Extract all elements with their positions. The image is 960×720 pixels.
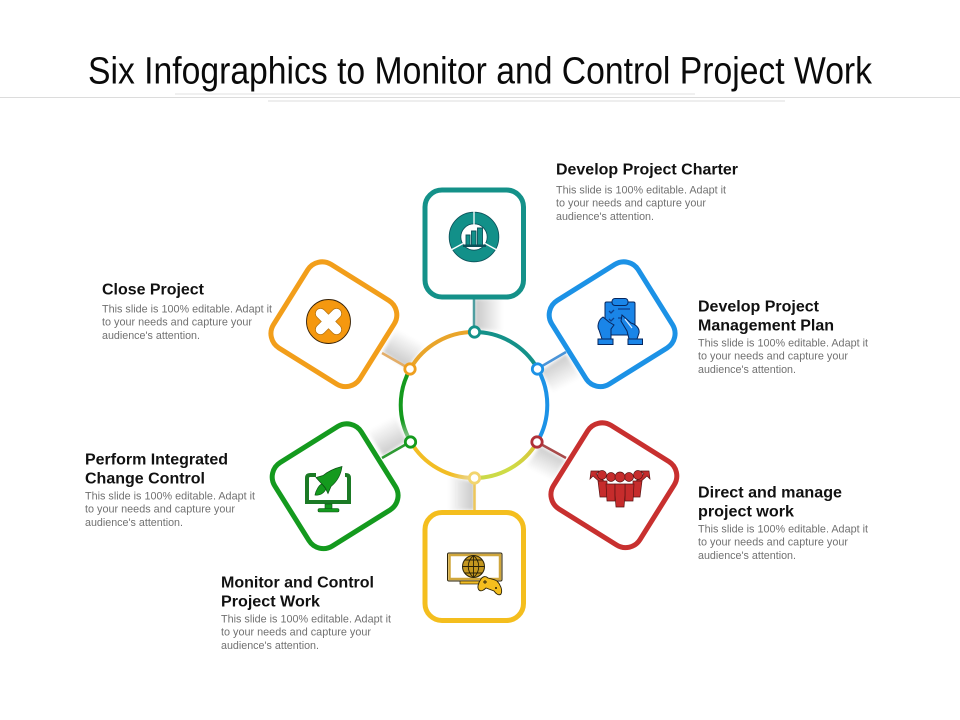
title: Six Infographics to Monitor and Control Project Work [88,50,873,92]
text block: develop project charter: Develop Project Charter [556,162,738,178]
text block: perform integrated change control: Perform Integrated [85,452,228,468]
text block: close project: This slide is 100% editable. Adapt it [102,304,272,316]
text block: perform integrated change control [85,452,255,529]
text block: develop project management plan: This slide is 100% editable. Adapt it [698,338,868,350]
icon: circle with white cross [306,300,350,344]
icon: monitor with rocket [307,466,349,512]
text block: develop project management plan [698,298,868,376]
text block: direct and manage project work: project work [698,504,794,520]
icon: clipboard with hands [598,298,642,344]
text block: monitor and control project work: to your needs and capture your [221,626,371,638]
text block: monitor and control project work: This slide is 100% editable. Adapt it [221,614,391,626]
icon: monitor with globe and game controller [448,553,502,595]
connector lines [382,299,566,511]
panel: develop project management plan [543,255,681,393]
text block: develop project management plan: Develop Project [698,298,820,316]
text block: direct and manage project work: audience's attention. [698,550,796,562]
text block: perform integrated change control: audience's attention. [85,517,183,529]
text block: monitor and control project work: Project Work [221,594,320,610]
text block: direct and manage project work: Direct and manage [698,484,842,502]
text block: develop project charter: This slide is 100% editable. Adapt it [556,184,726,196]
text block: develop project charter: to your needs and capture your [556,198,706,210]
text block: develop project management plan: to your needs and capture your [698,350,848,362]
text block: develop project charter [556,162,738,223]
text block: direct and manage project work [698,484,868,562]
panel: develop project charter [425,190,524,297]
central ring with six coloured arcs [401,332,547,478]
text block: direct and manage project work: to your needs and capture your [698,536,848,548]
panel: monitor and control project work [425,512,524,620]
text block: close project: Close Project [102,282,205,298]
icon: donut chart with bars [451,211,497,256]
text block: close project: to your needs and capture your [102,316,252,328]
text block: monitor and control project work: Monitor and Control [221,574,374,592]
text block: perform integrated change control: to your needs and capture your [85,504,235,516]
text block: perform integrated change control: This slide is 100% editable. Adapt it [85,490,255,502]
panel: perform integrated change control [266,417,404,555]
text block: monitor and control project work: audience's attention. [221,640,319,652]
text block: close project: audience's attention. [102,330,200,342]
text block: close project [102,282,272,342]
text block: develop project management plan: Management Plan [698,318,834,334]
panel: direct and manage project work [545,416,683,554]
node markers on the ring [405,327,543,483]
icon: group of people with arrows [590,470,650,507]
text block: develop project management plan: audience's attention. [698,364,796,376]
text block: perform integrated change control: Change Control [85,470,205,488]
text block: monitor and control project work [221,574,391,652]
text block: develop project charter: audience's attention. [556,211,654,223]
panel: close project [265,255,403,393]
text block: direct and manage project work: This slide is 100% editable. Adapt it [698,524,868,536]
header rule lines [0,94,960,101]
connector shadows [366,299,584,510]
